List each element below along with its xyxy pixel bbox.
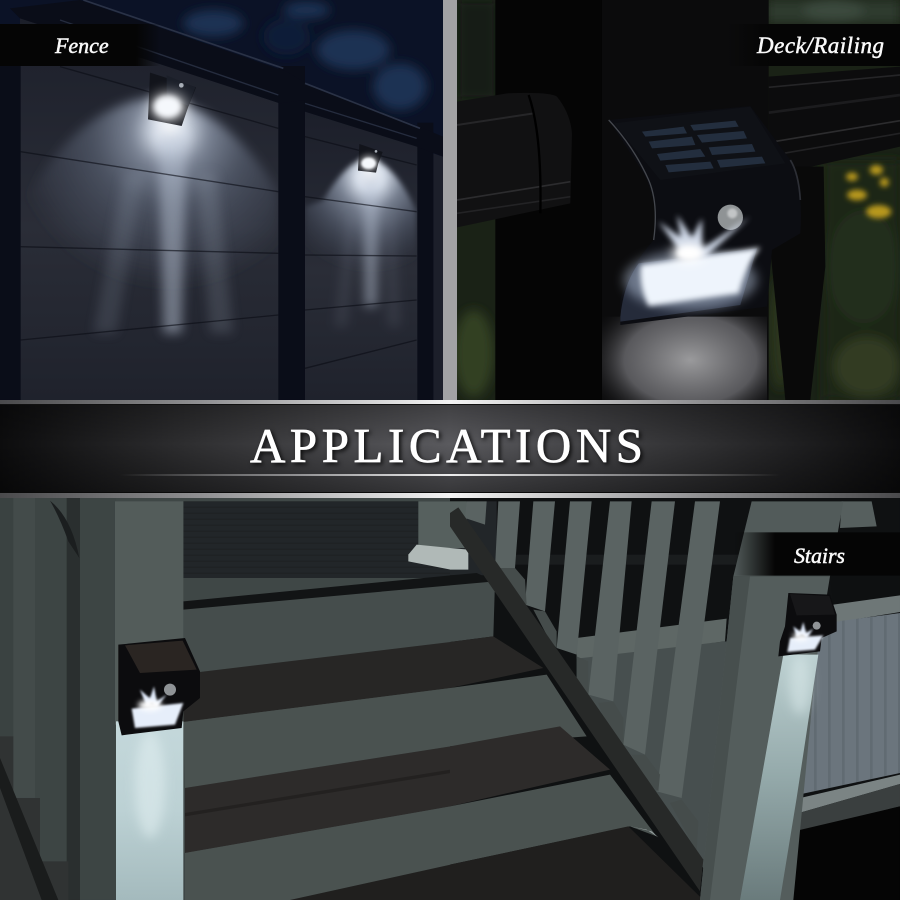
icon: stair lamp right	[778, 593, 837, 656]
light pool small	[305, 156, 418, 260]
divider between top panels	[443, 0, 457, 400]
garden background	[454, 0, 900, 400]
railing support leg	[770, 167, 825, 400]
lower-left stairs	[0, 736, 68, 900]
diagonal stair rail	[450, 507, 703, 891]
label: deck railing: Deck/Railing	[756, 33, 884, 58]
solar cells	[642, 121, 765, 172]
right wall	[780, 595, 900, 900]
far newel continuation	[450, 501, 468, 570]
light spill	[602, 316, 767, 400]
lens housing	[620, 248, 757, 322]
banner	[0, 400, 900, 498]
stairs right half	[450, 498, 900, 900]
main post	[115, 501, 183, 725]
upper deck floor	[183, 501, 451, 578]
far newel post	[408, 501, 451, 570]
plank seams	[21, 67, 417, 368]
label: deck railing	[756, 24, 900, 66]
label: fence	[0, 24, 160, 66]
title: APPLICATIONS	[250, 418, 643, 473]
fence posts and rails	[0, 0, 443, 400]
label: stairs	[733, 532, 900, 576]
stairs left half	[0, 498, 451, 900]
balusters	[465, 501, 720, 798]
far newel and dark right background	[840, 501, 877, 528]
fence boards	[20, 17, 443, 400]
panel: stairs	[0, 498, 900, 900]
baluster blocks	[493, 568, 698, 851]
lens	[641, 247, 760, 306]
motion sensor	[718, 205, 743, 230]
far posts	[0, 498, 116, 900]
panel: deck railing	[454, 0, 900, 433]
label: stairs: Stairs	[794, 543, 845, 568]
first riser	[183, 585, 451, 672]
light flare	[659, 215, 750, 258]
railing right	[769, 67, 900, 168]
treads and risers	[183, 642, 451, 722]
light rays small	[335, 173, 400, 327]
yellow flowers	[846, 165, 891, 218]
night foliage background	[183, 2, 427, 110]
lower wall	[577, 641, 727, 900]
horizontal top rail	[577, 619, 727, 659]
treads and risers	[450, 573, 495, 642]
lit post	[116, 721, 183, 900]
icon: fence lamp large	[148, 73, 196, 126]
icon: deck lamp	[609, 106, 801, 325]
post	[495, 0, 602, 400]
icon: fence lamp small	[358, 144, 383, 173]
right post	[700, 501, 843, 900]
light pool large	[40, 90, 278, 273]
icon: stair lamp left	[118, 638, 200, 735]
panel: fence	[0, 0, 443, 400]
railing left	[457, 93, 572, 227]
dark deck behind balusters	[450, 501, 497, 575]
light rays large	[93, 133, 233, 333]
label: fence: Fence	[54, 33, 109, 58]
